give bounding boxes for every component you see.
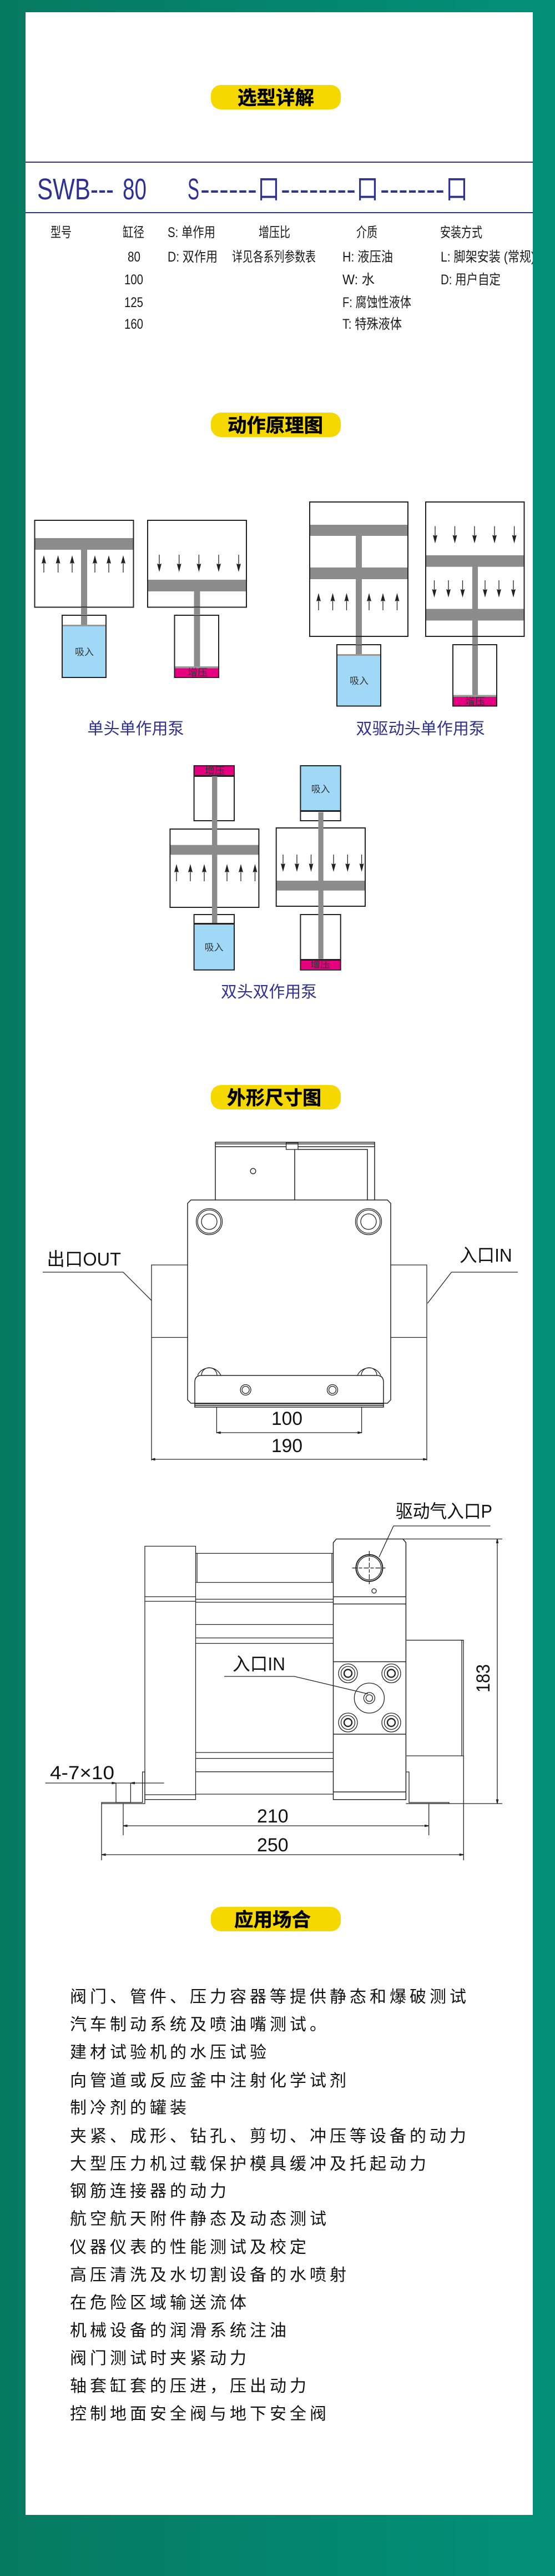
option table (51, 225, 535, 332)
option table: 型号 (51, 225, 72, 240)
option table: H: 液压油 (342, 249, 393, 265)
heading pill: outline dimensions (211, 1085, 341, 1109)
diagram: double head double acting, down stroke: 增压 (310, 960, 330, 970)
model code band: ------- (380, 173, 445, 206)
option table: 增压比 (259, 225, 290, 240)
section: working principle (34, 413, 524, 1001)
dimension: 250: 250 (257, 1835, 289, 1856)
option table: 详见各系列参数表 (232, 249, 316, 265)
diagram: dual drive head single acting, suction stroke: 吸入 (350, 676, 369, 686)
application list: 汽车制动系统及喷油嘴测试。 (70, 2016, 330, 2034)
diagram: double head double acting, down stroke (276, 766, 365, 970)
section: applications (70, 1907, 470, 2423)
option table: F: 腐蚀性液体 (342, 295, 411, 310)
option table: L: 脚架安装 (常规) (441, 249, 535, 265)
application list: 阀门、管件、压力容器等提供静态和爆破测试 (70, 1988, 470, 2006)
heading pill: outline dimensions: 外形尺寸图 (227, 1088, 321, 1109)
model code band: SWB--- (37, 173, 114, 206)
application list: 大型压力机过载保护模具缓冲及托起动力 (70, 2155, 430, 2173)
application list: 向管道或反应釜中注射化学试剂 (70, 2072, 350, 2090)
heading pill: applications (211, 1907, 341, 1931)
application list: 仪器仪表的性能测试及校定 (70, 2238, 310, 2257)
heading pill: selection details (211, 85, 341, 109)
application list: 在危险区域输送流体 (70, 2294, 250, 2312)
dimension: 210: 210 (257, 1806, 289, 1827)
diagram: single head single acting, suction stroke (34, 520, 133, 677)
application list: 轴套缸套的压进，压出动力 (70, 2377, 310, 2396)
option table: 安装方式 (440, 225, 482, 240)
dimension: mounting slot: 4-7×10 (50, 1762, 114, 1784)
diagram: double head double acting, up stroke: 吸入 (205, 942, 224, 953)
application list: 控制地面安全阀与地下安全阀 (70, 2405, 330, 2423)
application list: 航空航天附件静态及动态测试 (70, 2210, 330, 2228)
option table: 160 (124, 317, 143, 332)
model code band: 口 (356, 174, 379, 205)
model code band: ------ (200, 173, 257, 206)
caption: dual drive head single acting pump: 双驱动头单作用泵 (356, 720, 485, 738)
section: outline dimensions (43, 1085, 518, 1860)
diagram: dual drive head single acting, pressure stroke (426, 502, 524, 707)
model code band: S (188, 173, 199, 206)
application list: 高压清洗及水切割设备的水喷射 (70, 2266, 350, 2284)
application list: 钢筋连接器的动力 (70, 2182, 230, 2201)
dimension: 183: 183 (473, 1664, 494, 1693)
option table: 80 (128, 249, 140, 265)
caption: single head single acting pump: 单头单作用泵 (88, 720, 184, 738)
application list: 制冷剂的罐装 (70, 2099, 190, 2117)
label: inlet: 入口IN (460, 1245, 512, 1266)
application list: 建材试验机的水压试验 (70, 2043, 270, 2062)
diagram: dual drive head single acting, suction stroke (310, 502, 408, 706)
dimension: 100: 100 (271, 1408, 302, 1429)
drawing: front view (43, 1142, 518, 1460)
application list: 阀门测试时夹紧动力 (70, 2349, 250, 2368)
option table: T: 特殊液体 (342, 317, 402, 332)
heading pill: working principle: 动作原理图 (228, 415, 323, 436)
application list: 夹紧、成形、钻孔、剪切、冲压等设备的动力 (70, 2127, 470, 2146)
diagram: single head single acting, pressure stroke: 增压 (188, 667, 208, 678)
diagram: single head single acting, pressure stroke (148, 520, 246, 678)
diagram: double head double acting, up stroke (170, 766, 259, 970)
model code band: 口 (258, 174, 280, 205)
option table: 125 (124, 295, 143, 310)
drawing: side view (46, 1526, 502, 1860)
heading pill: applications: 应用场合 (234, 1910, 311, 1931)
heading pill: selection details: 选型详解 (238, 88, 314, 109)
option table: S: 单作用 (168, 225, 215, 240)
model code band: 口 (446, 174, 468, 205)
diagram: single head single acting, suction stroke: 吸入 (75, 647, 94, 657)
diagram: double head double acting, down stroke: 吸入 (311, 784, 330, 795)
option table: 缸径 (123, 225, 144, 240)
option table: 介质 (356, 225, 377, 240)
section: selection guide (26, 85, 535, 332)
option table: D: 用户自定 (441, 272, 501, 288)
model code band (26, 162, 533, 213)
option table: 100 (124, 272, 143, 288)
model code band: -------- (281, 173, 356, 206)
diagram: double head double acting, up stroke: 增压 (205, 766, 225, 776)
option table: D: 双作用 (168, 249, 218, 265)
label: side inlet: 入口IN (233, 1654, 285, 1674)
application list: 机械设备的润滑系统注油 (70, 2322, 290, 2340)
diagram: dual drive head single acting, pressure stroke: 增压 (465, 696, 485, 707)
model code band: 80 (123, 173, 147, 206)
label: outlet: 出口OUT (47, 1249, 121, 1269)
application list (70, 1988, 470, 2423)
caption: double head double acting pump: 双头双作用泵 (221, 983, 317, 1001)
dimension: 190: 190 (271, 1435, 302, 1457)
heading pill: working principle (211, 413, 341, 437)
option table: W: 水 (342, 272, 375, 288)
label: drive air inlet: 驱动气入口P (396, 1501, 492, 1522)
